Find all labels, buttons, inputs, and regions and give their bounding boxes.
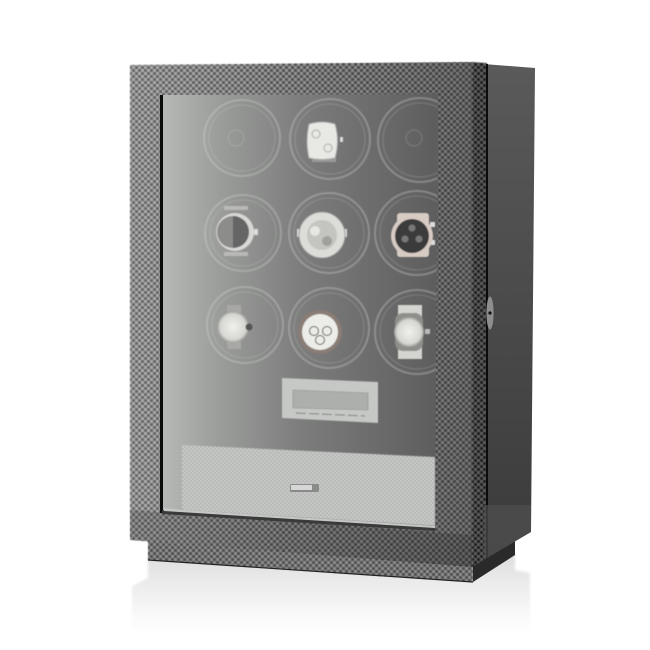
watches (216, 122, 435, 359)
bottom drawer (164, 445, 435, 528)
cabinet right side (470, 62, 535, 567)
watch top middle (307, 122, 343, 162)
floor reflection (132, 553, 530, 632)
watch row 3 right (394, 305, 430, 359)
watch row 2 middle (297, 212, 347, 258)
glass door (160, 94, 462, 531)
plinth (148, 538, 515, 582)
front frame (130, 62, 472, 567)
illustration: watch winder cabinet (129, 61, 535, 610)
watch row 2 left (216, 206, 258, 256)
display panel (282, 378, 378, 423)
side lock button (486, 296, 494, 330)
watch row 3 left (217, 305, 252, 349)
watch row 3 middle (298, 310, 342, 354)
watch row 2 right (391, 213, 435, 257)
winder rings (204, 98, 462, 374)
drawer handle (290, 484, 319, 492)
